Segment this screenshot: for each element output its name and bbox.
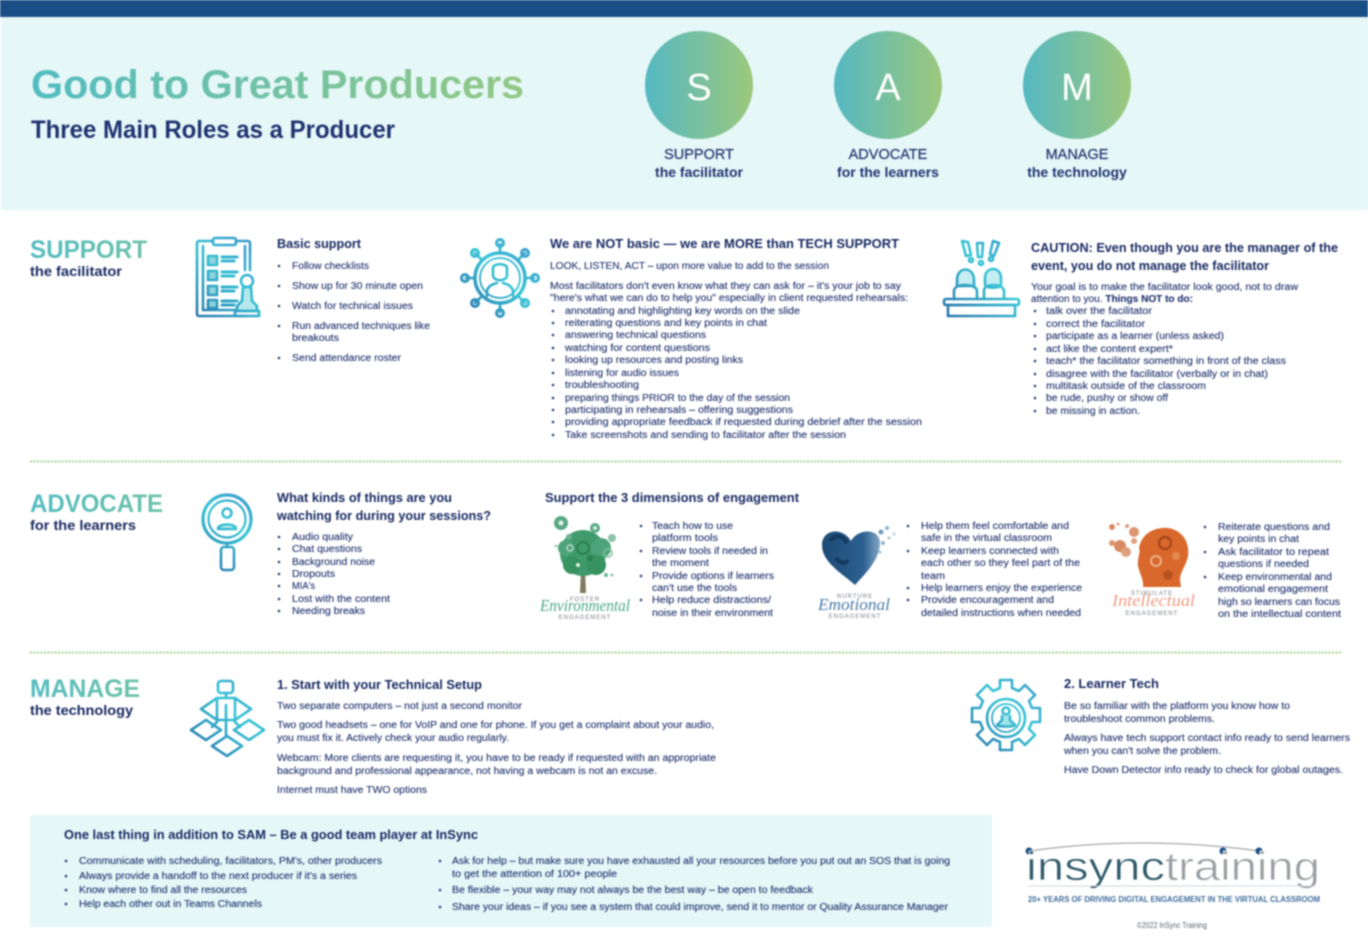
list: things not to do: disagree with the facilitator (verbally or in chat) [1046,369,1268,380]
list: producer help: providing appropriate feedback if requested during debrief after the session [565,417,922,428]
SAM role: advocate: ADVOCATE [849,147,928,163]
SAM role: advocate: A [875,67,901,109]
block: learner tech: when you can't solve the problem. [1063,746,1221,757]
logo: stimulate intellectual engagement head: STIMULATE [1131,591,1173,597]
list: environmental: can't use the tools [652,583,737,594]
block: caution: attention to you. Things NOT to do: [1031,294,1193,305]
logo: insync training: training [1165,845,1320,889]
subtitle: Three Main Roles as a Producer [31,116,395,144]
copyright: ©2022 InSync Training [1137,921,1207,930]
list: emotional: team [921,571,945,582]
block: learner tech: Have Down Detector info ready to check for global outages. [1064,765,1343,776]
block: more than tech support: LOOK, LISTEN, ACT – upon more value to add to the session [550,261,829,272]
block: caution [1031,241,1338,417]
logo: foster environmental engagement tree [539,516,630,621]
list: things not to do: be missing in action. [1046,406,1140,417]
list: intellectual: Reiterate questions and [1218,522,1330,533]
logo: nurture emotional engagement heart: NURTURE [837,594,873,600]
list: environmental: noise in their environment [652,608,773,619]
list: watch items [278,532,390,617]
SAM role: advocate [834,31,942,180]
list: emotional: Keep learners connected with [921,546,1059,557]
block: caution: Your goal is to make the facilitator look good, not to draw [1031,282,1299,293]
list: team player left: Always provide a handoff to the next producer if it's a series [79,871,357,882]
logo: stimulate intellectual engagement head [1109,522,1195,617]
list: things not to do: talk over the facilitator [1046,306,1153,317]
block: technical setup: background and professional appearance, not having a webcam is not an excuse. [277,766,657,777]
list: producer help: participating in rehearsals – offering suggestions [565,405,793,416]
icon: gear with person [972,680,1040,750]
list: watch items: Background noise [292,557,375,568]
list: producer help: troubleshooting [565,380,639,391]
block: more than tech support: "here's what we can do to help you" especially in client requested rehearsals: [550,293,908,304]
logo: nurture emotional engagement heart [817,526,896,620]
list: basic support: Run advanced techniques like [292,321,430,332]
list: team player right: Ask for help – but make sure you have exhausted all your resources before you put out an SOS that is going [452,856,950,867]
block: technical setup: Webcam: More clients are requesting it, you have to be ready if requested with an appropriate [277,753,716,764]
block: caution: CAUTION: Even though you are the manager of the [1031,241,1338,255]
logo: nurture emotional engagement heart: Emotional [817,595,890,614]
list: things not to do: multitask outside of the classroom [1046,381,1206,392]
SAM role: manage: M [1061,67,1093,109]
logo: insync training: 20+ YEARS OF DRIVING DIGITAL ENGAGEMENT IN THE VIRTUAL CLASSROOM [1028,894,1320,904]
list: environmental: platform tools [652,533,718,544]
list: basic support: breakouts [292,333,339,344]
SAM role: advocate: for the learners [837,164,939,180]
icon: clipboard checklist [197,238,259,316]
list: emotional [907,521,1082,619]
list: intellectual: Ask facilitator to repeat [1218,547,1329,558]
block: technical setup [277,678,716,796]
list: intellectual: questions if needed [1218,559,1309,570]
block: technical setup: you must fix it. Actively check your audio regularly. [277,733,509,744]
block: learner tech: 2. Learner Tech [1064,677,1159,691]
top bar [0,0,1368,17]
block: basic support [277,237,430,364]
block: technical setup: Two good headsets – one for VoIP and one for phone. If you get a complaint about your audio, [277,720,714,731]
list: intellectual: key points in chat [1218,534,1299,545]
list: producer help: preparing things PRIOR to the day of the session [565,393,790,404]
list: team player left [65,856,382,910]
list: team player right [439,856,950,913]
header band [1,17,1368,210]
logo: foster environmental engagement tree: ENGAGEMENT [559,615,611,621]
list: producer help [552,306,922,441]
list: team player left: Help each other out in Teams Channels [79,899,262,910]
block: what to watch for: What kinds of things are you [277,491,452,505]
block: learner tech: Always have tech support contact info ready to send learners [1064,733,1350,744]
icon: person with network diamonds [191,681,264,756]
panel: team player: One last thing in addition to SAM – Be a good team player at InSync [64,828,478,842]
list: basic support: Send attendance roster [292,353,402,364]
list: watch items: Lost with the content [292,594,390,605]
block: learner tech: troubleshoot common problems. [1064,714,1215,725]
section heading: support: SUPPORT [30,236,147,264]
block: more than tech support [550,237,922,441]
list: intellectual: Keep environmental and [1218,572,1332,583]
SAM role: support: SUPPORT [664,147,734,163]
list: environmental: the moment [652,558,709,569]
section heading: manage [30,675,140,718]
list: intellectual: on the intellectual content [1218,609,1341,620]
list: team player right: Share your ideas – if you see a system that could improve, send it to mentor or Quality Assurance Manager [452,902,949,913]
list: team player left: Communicate with scheduling, facilitators, PM's, other producers [79,856,382,867]
list: watch items: Needing breaks [292,606,365,617]
list: things not to do: teach* the facilitator something in front of the class [1046,356,1286,367]
list: emotional: Provide encouragement and [921,595,1054,606]
list: watch items: Dropouts [292,569,335,580]
list: environmental: Provide options if learners [652,571,774,582]
list: intellectual: emotional engagement [1218,584,1328,595]
list: things not to do [1034,306,1286,417]
list: emotional: detailed instructions when needed [921,608,1081,619]
icon: two people at desk with exclamation marks [944,241,1019,316]
section heading: manage: MANAGE [30,675,140,703]
block: more than tech support: Most facilitators don't even know what they can ask for – it's your job to say [550,281,901,292]
SAM role: manage: MANAGE [1046,147,1109,163]
logo: insync training [1026,843,1320,904]
section heading: advocate: ADVOCATE [30,490,163,518]
list: producer help: Take screenshots and sending to facilitator after the session [565,430,846,441]
list: environmental: Help reduce distractions/ [652,595,771,606]
list: environmental [640,521,774,619]
panel: team player [30,815,992,927]
block: learner tech [1063,677,1350,776]
SAM role: support: S [686,67,712,109]
icon: ship wheel with person [462,240,538,316]
list: producer help: reiterating questions and key points in chat [565,318,767,329]
block: caution: event, you do not manage the facilitator [1031,259,1269,273]
SAM role: support [645,31,753,180]
block: learner tech: Be so familiar with the platform you know how to [1064,701,1290,712]
list: intellectual [1204,522,1341,620]
block: technical setup: Two separate computers – not just a second monitor [277,701,523,712]
section heading: support [30,236,147,279]
list: producer help: listening for audio issues [565,368,679,379]
list: things not to do: be rude, pushy or show off [1046,393,1168,404]
logo: stimulate intellectual engagement head: Intellectual [1111,591,1195,610]
list: things not to do: participate as a learner (unless asked) [1046,331,1224,342]
section heading: support: the facilitator [30,263,123,279]
list: producer help: annotating and highlighting key words on the slide [565,306,800,317]
list: producer help: looking up resources and posting links [565,355,743,366]
list: emotional: each other so they feel part of the [921,558,1080,569]
SAM role: support: the facilitator [655,164,744,180]
list: producer help: answering technical questions [565,330,706,341]
logo: stimulate intellectual engagement head: ENGAGEMENT [1126,611,1178,617]
block: basic support: Basic support [277,237,362,251]
list: team player left: Know where to find all the resources [79,885,247,896]
SAM role: manage: the technology [1027,164,1127,180]
block: more than tech support: We are NOT basic — we are MORE than TECH SUPPORT [550,237,899,251]
list: emotional: Help them feel comfortable and [921,521,1069,532]
list: basic support: Watch for technical issues [292,301,413,312]
section heading: advocate [30,490,163,533]
list: intellectual: high so learners can focus [1218,597,1340,608]
heading: 3 dimensions of engagement: Support the 3 dimensions of engagement [545,491,800,505]
list: environmental: Teach how to use [652,521,733,532]
list: producer help: watching for content questions [564,343,710,354]
list: watch items: Audio quality [292,532,353,543]
list: emotional: Help learners enjoy the experience [921,583,1082,594]
list: basic support: Follow checklists [292,261,369,272]
list: team player right: Be flexible – your way may not always be the best way – be open to feedback [452,885,814,896]
list: environmental: Review tools if needed in [652,546,768,557]
block: technical setup: Internet must have TWO options [277,785,427,796]
list: basic support: Show up for 30 minute open [292,281,423,292]
block: technical setup: 1. Start with your Technical Setup [277,678,482,692]
list: watch items: MIA's [292,581,315,592]
title: Good to Great Producers [31,63,524,107]
block: what to watch for [276,491,491,617]
list: basic support [278,261,430,364]
section heading: manage: the technology [30,702,133,718]
logo: foster environmental engagement tree: FOSTER [570,597,600,603]
block: what to watch for: watching for during your sessions? [276,509,491,523]
icon: magnifying glass with person [203,495,251,570]
list: things not to do: correct the facilitator [1046,319,1146,330]
list: watch items: Chat questions [292,544,362,555]
logo: foster environmental engagement tree: Environmental [539,596,630,615]
list: team player right: to get the attention of 100+ people [452,869,617,880]
logo: insync training: insync [1026,845,1165,889]
section heading: advocate: for the learners [30,517,136,533]
list: things not to do: act like the content expert* [1046,344,1173,355]
logo: nurture emotional engagement heart: ENGAGEMENT [829,614,881,620]
SAM role: manage [1023,31,1131,180]
list: emotional: safe in the virtual classroom [921,533,1052,544]
